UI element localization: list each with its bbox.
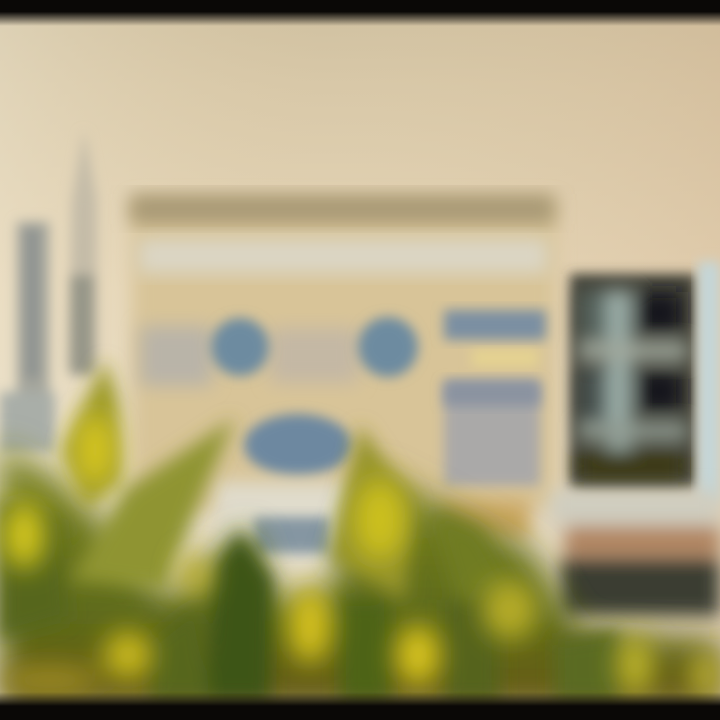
- upper part of lower panel: [444, 380, 540, 406]
- blue circle right: [358, 317, 418, 377]
- foliage: [0, 360, 720, 712]
- central building panel: [130, 194, 556, 562]
- light band: [138, 238, 548, 274]
- lower right building and roof: [440, 490, 720, 616]
- light lower area: [215, 482, 355, 562]
- right dark building: [570, 274, 696, 490]
- header band: [130, 194, 555, 224]
- blue circle left: [211, 318, 269, 376]
- bottom black bar: [0, 692, 720, 720]
- top black bar: [0, 0, 720, 26]
- yellow text band: [472, 350, 538, 366]
- middle grey block: [270, 328, 358, 383]
- yellow highlights: [0, 414, 720, 699]
- lower blue block: [254, 517, 330, 553]
- grey-blue lower panel: [444, 382, 540, 486]
- building body: [132, 200, 556, 510]
- arch oval: [244, 414, 352, 476]
- foliage mass: [0, 445, 720, 712]
- blue bar: [444, 310, 546, 340]
- leaves: [0, 360, 620, 700]
- left grey block: [140, 326, 212, 386]
- windows: [578, 290, 688, 482]
- right pale tower: [698, 262, 720, 502]
- left skyline towers: [0, 130, 97, 452]
